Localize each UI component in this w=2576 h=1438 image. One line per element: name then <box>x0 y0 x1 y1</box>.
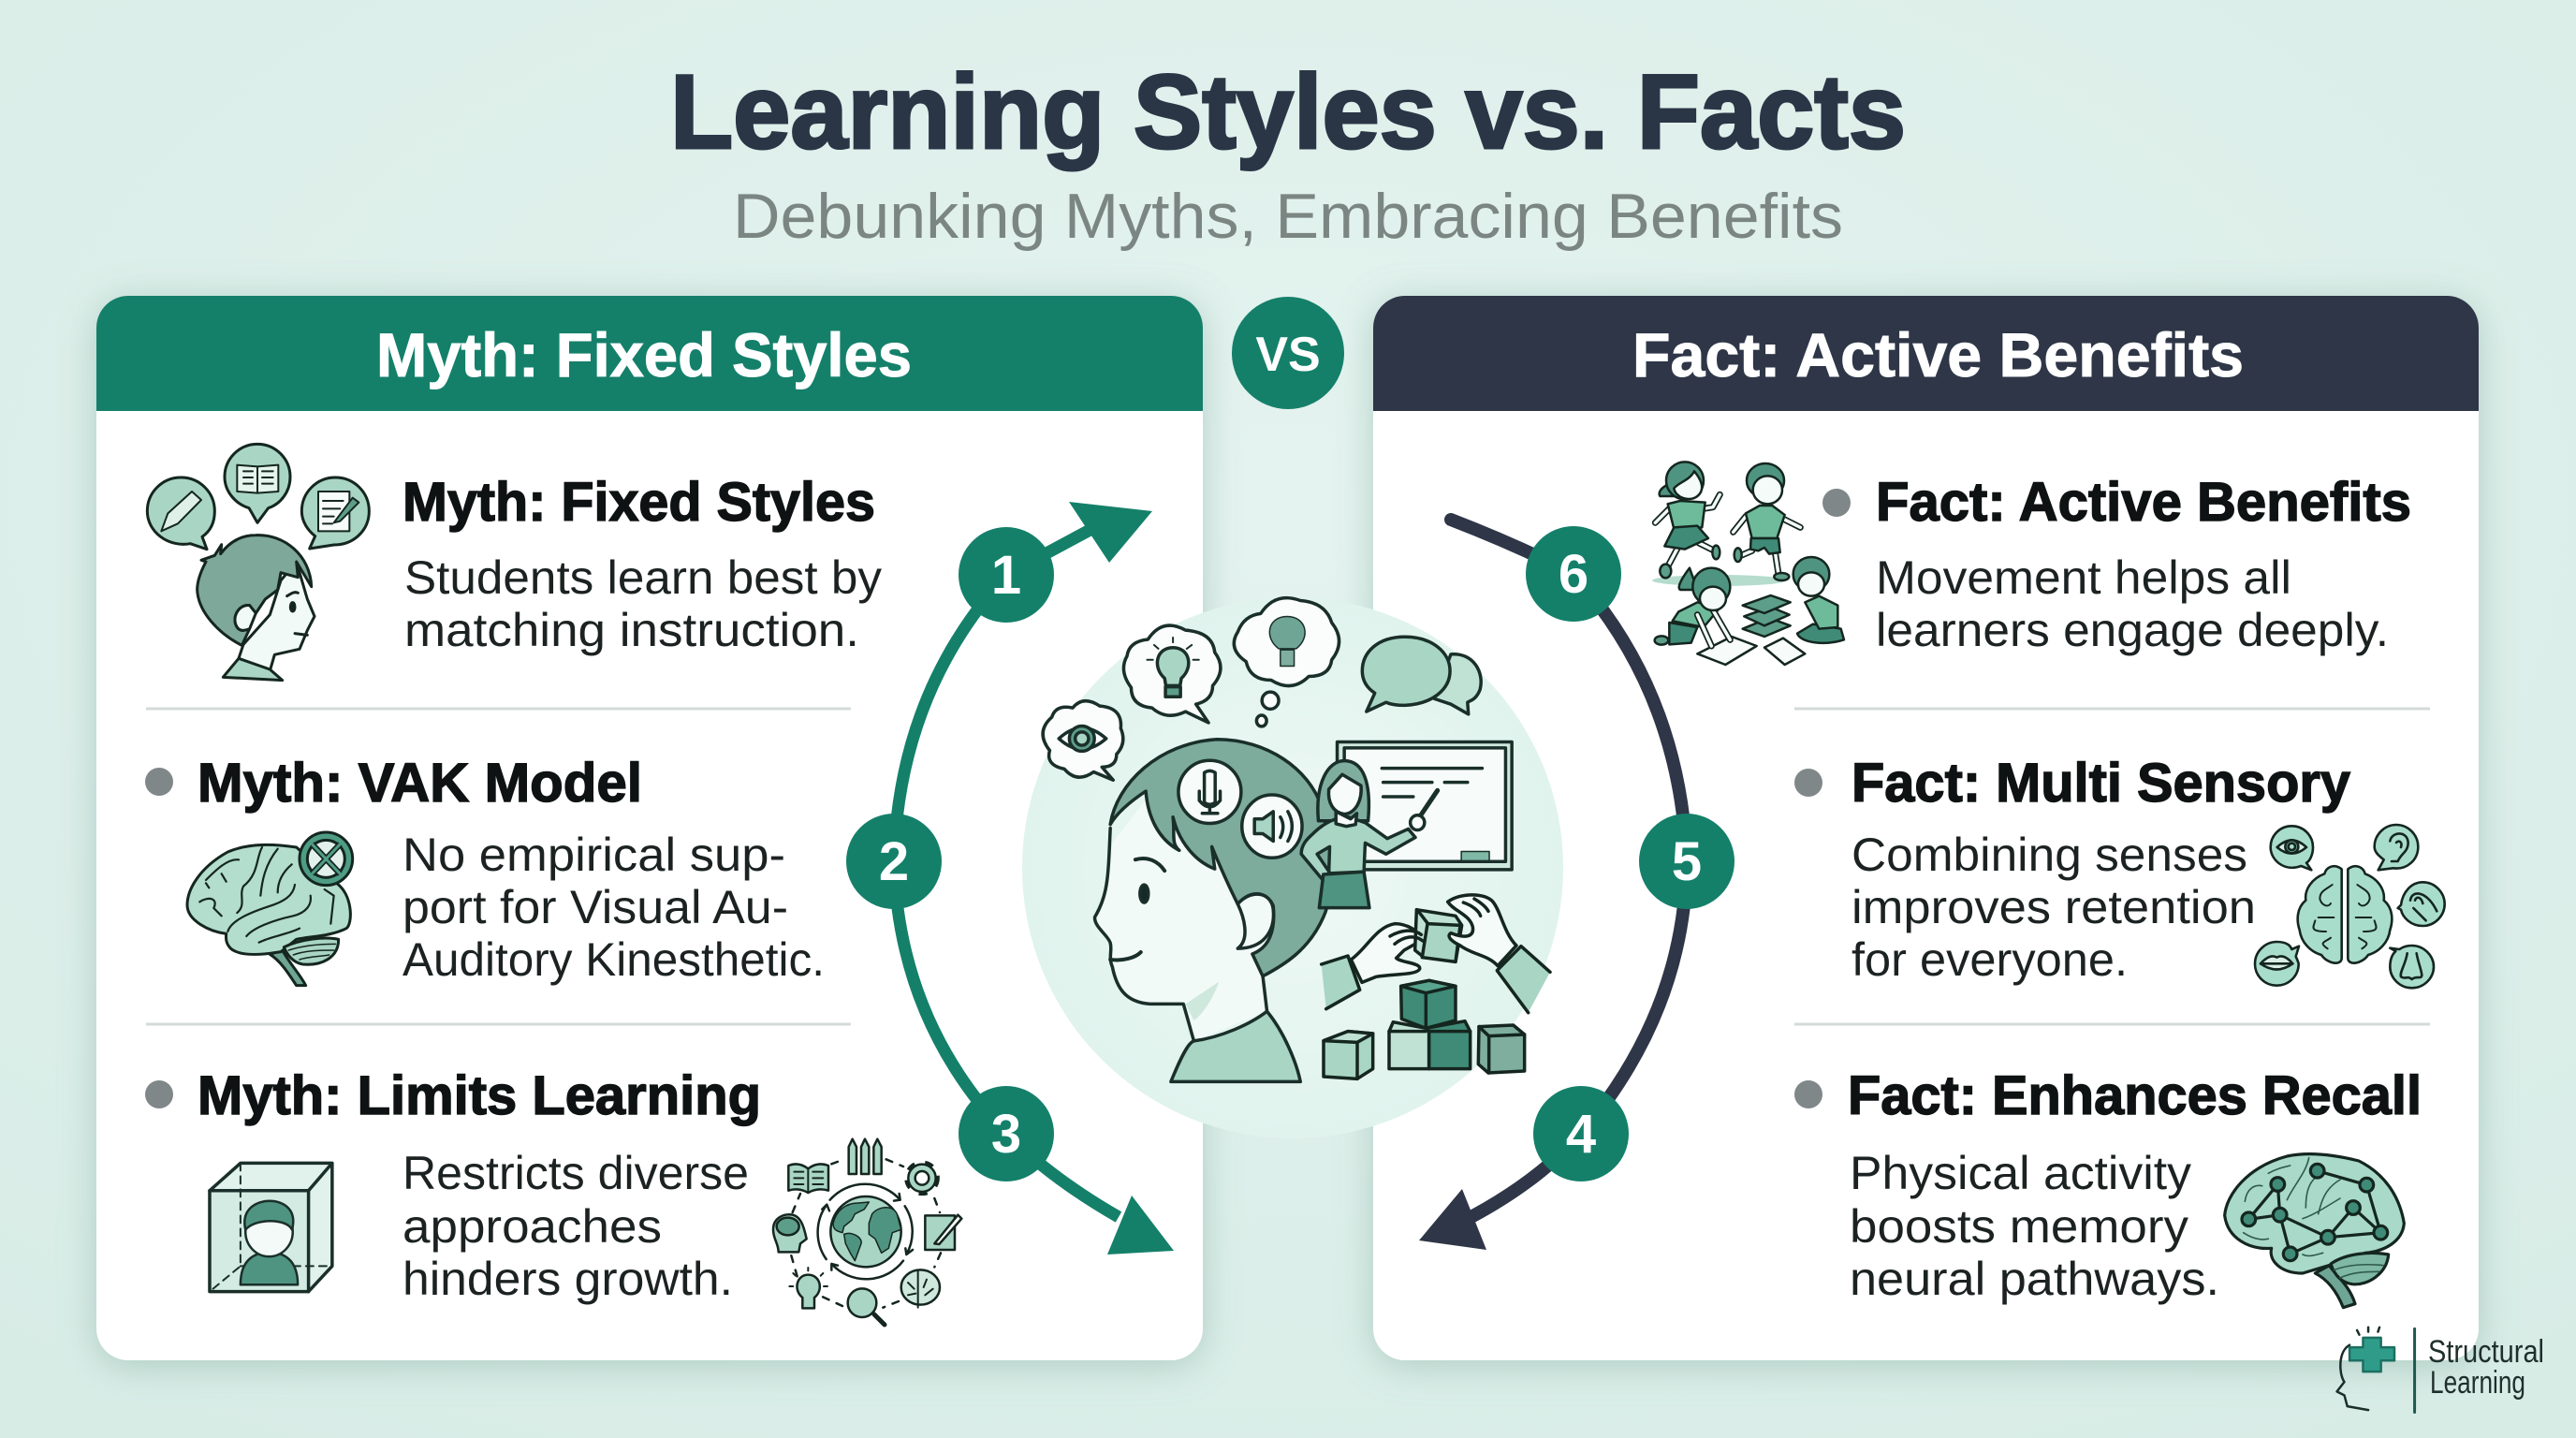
left text: myth 2 <box>145 753 825 986</box>
badge 6: 6 <box>1559 544 1588 605</box>
logo: Structural Learning: Learning <box>2430 1365 2525 1401</box>
left text: myth 2: No empirical sup- <box>402 829 785 881</box>
left text: myth 1 <box>402 472 882 656</box>
arrowhead: bottom <box>1107 1196 1174 1255</box>
badge 2 <box>846 814 942 909</box>
right text: fact 2: Fact: Multi Sensory <box>1852 753 2350 814</box>
arrowhead: dark <box>1419 1189 1486 1250</box>
cortex <box>2225 1154 2404 1273</box>
left text: myth 3: Restricts diverse <box>402 1147 749 1199</box>
title: Learning Styles vs. Facts <box>670 53 1906 170</box>
brain folds <box>2313 885 2377 948</box>
logo: Structural Learning: Structural <box>2428 1334 2544 1370</box>
gear <box>907 1163 937 1194</box>
nose bubble <box>2390 946 2434 988</box>
cerebellum <box>2331 1253 2389 1284</box>
left text: myth 3: hinders growth. <box>402 1253 733 1305</box>
running boy <box>1734 463 1800 580</box>
logo icon <box>2337 1328 2415 1412</box>
left text: myth 3 <box>145 1065 761 1305</box>
right hand and sleeve <box>1448 895 1550 1013</box>
left text: myth 3: Myth: Limits Learning <box>198 1065 761 1126</box>
eye bubble <box>2271 826 2313 870</box>
icon: eye thought bubble <box>1043 701 1123 780</box>
icon: speech bubbles <box>1362 637 1481 714</box>
vs badge: VS <box>1255 328 1321 382</box>
center illustration <box>1022 597 1563 1138</box>
right text: fact 2 <box>1794 753 2350 986</box>
panel card: myth <box>96 296 1203 1360</box>
running girl <box>1655 462 1720 578</box>
teacher <box>1301 761 1438 908</box>
arrow: green myth cycle <box>894 502 1174 1255</box>
icon: child in box <box>210 1163 332 1292</box>
center circle <box>1022 597 1563 1138</box>
badge 1: 1 <box>991 545 1021 606</box>
seated boy <box>1793 557 1844 643</box>
heading: myth: Myth: Fixed Styles <box>376 320 912 389</box>
crouching girl <box>1655 568 1757 665</box>
right text: fact 3 <box>1794 1065 2422 1305</box>
icon: brain memory pathways <box>2225 1154 2404 1308</box>
number badges <box>846 526 1734 1181</box>
logo: Structural Learning <box>2337 1328 2544 1412</box>
arrow: dark fact cycle <box>1419 520 1687 1250</box>
heading: fact: Fact: Active Benefits <box>1632 320 2244 389</box>
subtitle: Debunking Myths, Embracing Benefits <box>733 181 1843 252</box>
icon: world learning cycle <box>773 1139 961 1325</box>
brain stem <box>2315 1266 2355 1308</box>
arrowhead: top <box>1069 502 1152 563</box>
badge 1 <box>959 527 1054 623</box>
icon: light bulb bubble <box>1123 625 1221 723</box>
panel card: fact <box>1373 296 2479 1360</box>
dividers <box>146 709 2430 1024</box>
second ear bubble <box>2398 882 2445 926</box>
badge 4 <box>1533 1086 1629 1181</box>
right text: fact 2: improves retention <box>1852 881 2256 933</box>
loose blocks <box>1324 1025 1525 1078</box>
right text: fact 1: Movement helps all <box>1876 551 2291 604</box>
badge 3: 3 <box>991 1104 1021 1165</box>
ear bubble <box>2375 825 2418 870</box>
whiteboard <box>1338 742 1512 870</box>
magnifier <box>848 1288 885 1325</box>
nodes <box>2242 1164 2388 1261</box>
left text: myth 3: approaches <box>402 1200 662 1253</box>
right text: fact 1: learners engage deeply. <box>1876 604 2389 656</box>
badge 5 <box>1639 814 1734 909</box>
stacked blocks <box>1389 980 1471 1069</box>
right text: fact 2: for everyone. <box>1852 933 2128 986</box>
icon: brain with senses <box>2255 825 2445 988</box>
brain <box>901 1269 940 1308</box>
left hand and sleeve <box>1322 924 1424 1009</box>
right text: fact 3: neural pathways. <box>1850 1253 2219 1305</box>
globe <box>818 1184 913 1279</box>
light bulb <box>789 1268 827 1308</box>
right text: fact 1 <box>1822 472 2411 656</box>
badge 4: 4 <box>1566 1104 1596 1165</box>
right text: fact 3: Fact: Enhances Recall <box>1848 1065 2422 1126</box>
icon: boy with study bubbles <box>147 444 369 681</box>
pencils <box>849 1139 882 1174</box>
right lobe <box>2348 866 2392 963</box>
book <box>788 1164 828 1193</box>
vs badge <box>1232 297 1344 409</box>
left text: myth 2: port for Visual Au- <box>402 881 788 933</box>
icon: idea thought bubble <box>1234 598 1339 726</box>
icon: brain with cross <box>187 832 353 986</box>
panel: fact <box>1373 296 2479 1360</box>
lips bubble <box>2255 942 2299 986</box>
right text: fact 1: Fact: Active Benefits <box>1876 472 2411 533</box>
badge 6 <box>1526 526 1621 622</box>
icon: hands, held block and building blocks <box>1322 895 1550 1078</box>
left text: myth 1: Myth: Fixed Styles <box>402 472 875 533</box>
left lobe <box>2298 866 2342 963</box>
left text: myth 1: matching instruction. <box>404 604 859 656</box>
right text: fact 2: Combining senses <box>1852 829 2247 881</box>
connections <box>2248 1171 2380 1254</box>
icon: children active <box>1652 462 1844 665</box>
right text: fact 3: boosts memory <box>1850 1200 2188 1253</box>
badge 2: 2 <box>879 831 909 892</box>
badge 3 <box>959 1086 1054 1181</box>
panel: myth <box>96 296 1203 1360</box>
head with brain <box>773 1214 807 1252</box>
folds <box>2244 1158 2384 1278</box>
document and pen <box>925 1215 961 1250</box>
books and papers <box>1743 595 1805 665</box>
left text: myth 2: Myth: VAK Model <box>198 753 642 814</box>
learner and multi-sensory scene <box>1043 598 1512 1081</box>
badge 5: 5 <box>1672 831 1702 892</box>
right text: fact 3: Physical activity <box>1850 1147 2191 1199</box>
boy head <box>1095 740 1331 1081</box>
panel header: myth <box>96 296 1203 411</box>
left text: myth 2: Auditory Kinesthetic. <box>402 933 825 986</box>
held block <box>1390 910 1462 961</box>
panel header: fact <box>1373 296 2479 411</box>
left text: myth 1: Students learn best by <box>404 551 882 604</box>
